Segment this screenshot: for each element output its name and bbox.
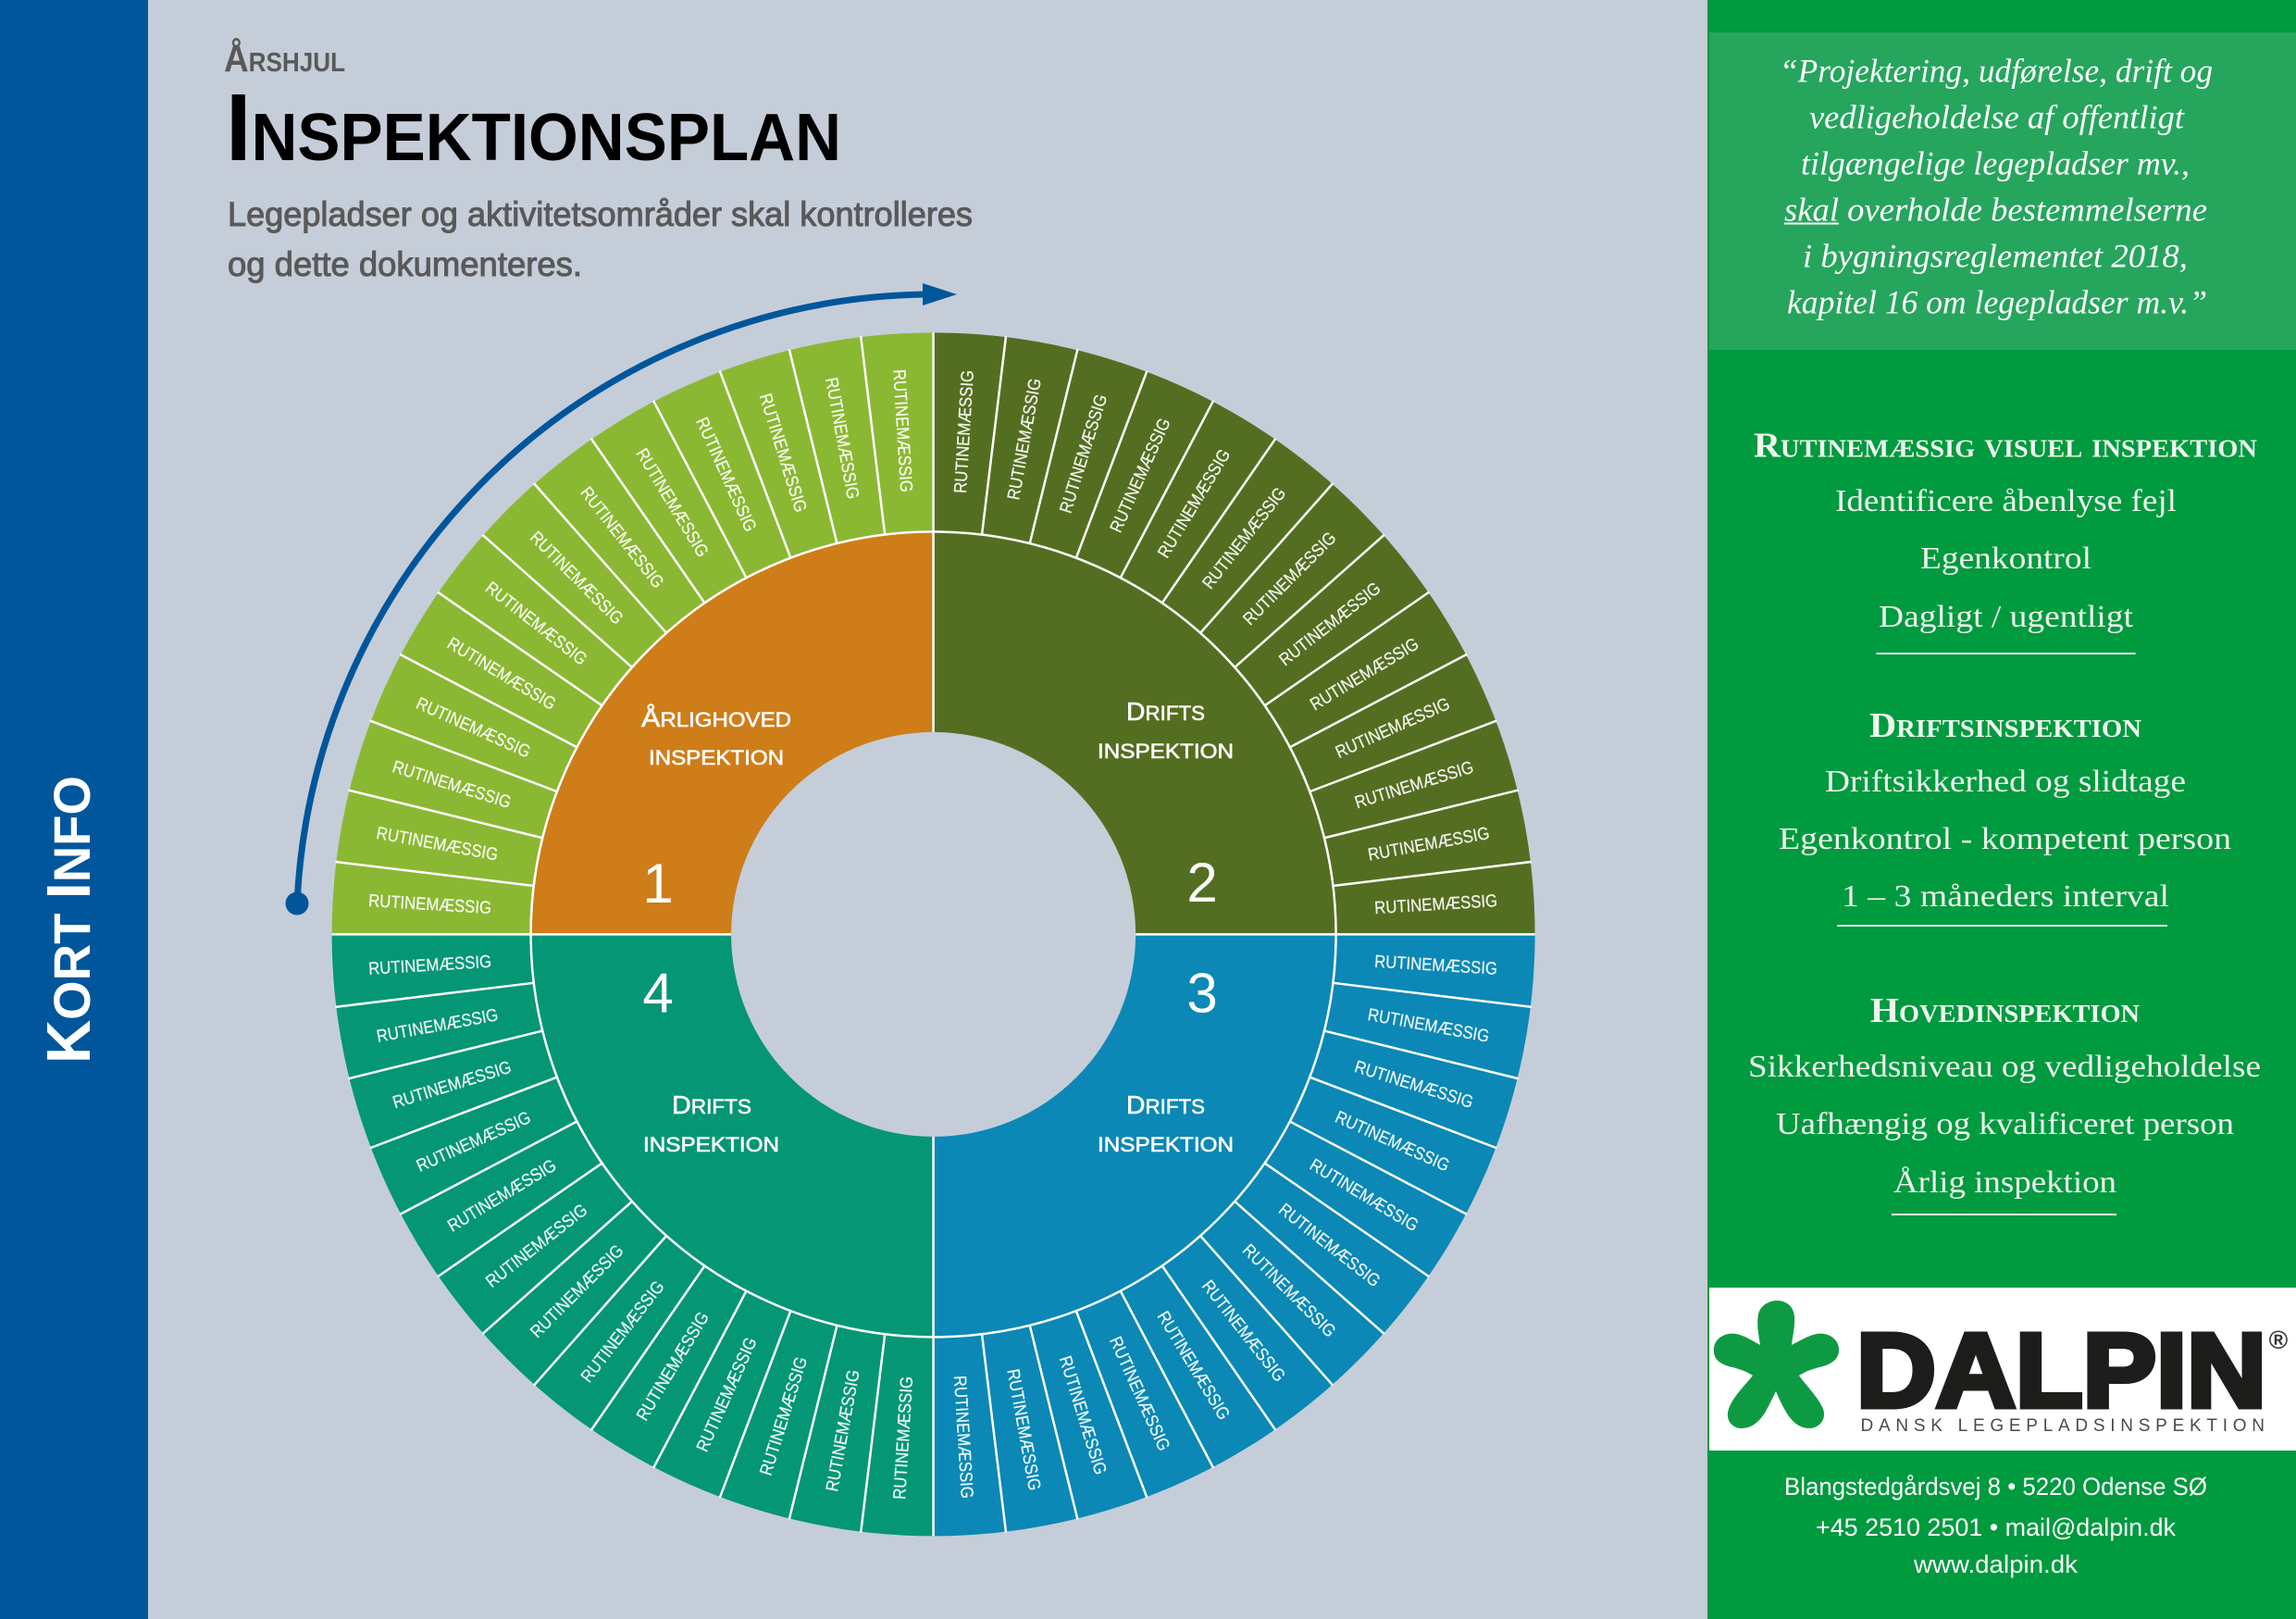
routine labels: quadrant 4: RUTINEMÆSSIG [482, 1201, 591, 1292]
routine labels: quadrant 1: RUTINEMÆSSIG [691, 415, 760, 535]
routine labels: quadrant 1: RUTINEMÆSSIG [413, 694, 533, 763]
callout: legal quote: skal overholde bestemmelserne [1784, 191, 2207, 228]
routine labels: quadrant 4: RUTINEMÆSSIG [527, 1241, 627, 1342]
arrow: year direction [285, 283, 957, 915]
caption: quadrant 1 [641, 704, 791, 769]
tagline: DANSK LEGEPLADSINSPEKTION [1860, 1416, 2265, 1436]
caption: quadrant 3 [1098, 1090, 1234, 1156]
routine labels: quadrant 4: RUTINEMÆSSIG [444, 1156, 560, 1237]
subtitle text: og dette dokumenteres. [228, 245, 582, 283]
routine labels: quadrant 4 [368, 953, 917, 1500]
routine labels: quadrant 1: RUTINEMÆSSIG [526, 528, 627, 629]
caption: quadrant 1: ÅRLIGHOVED [641, 704, 791, 732]
routine labels: quadrant 1: RUTINEMÆSSIG [576, 483, 667, 592]
contact details [1784, 1473, 2207, 1578]
inner wedge: quadrant 1 [531, 531, 934, 934]
routine labels: quadrant 2: RUTINEMÆSSIG [1353, 758, 1476, 813]
routine labels: quadrant 3: RUTINEMÆSSIG [1352, 1057, 1475, 1113]
text block: operational inspection: Egenkontrol - kompetent person [1779, 822, 2231, 856]
routine labels: quadrant 2: RUTINEMÆSSIG [1367, 824, 1491, 866]
logo: Dalpin [1709, 1288, 2296, 1451]
callout: legal quote: i bygningsreglementet 2018, [1803, 237, 2188, 274]
callout: legal quote: “Projektering, udførelse, drift og [1780, 52, 2213, 89]
routine labels: quadrant 2: RUTINEMÆSSIG [1374, 891, 1498, 918]
routine labels: quadrant 1: RUTINEMÆSSIG [631, 445, 712, 561]
routine labels: quadrant 1: RUTINEMÆSSIG [443, 634, 559, 715]
routine labels: quadrant 3: RUTINEMÆSSIG [1002, 1367, 1044, 1492]
caption: quadrant 4: INSPEKTION [643, 1133, 779, 1156]
quadrant 4: operational inspection [332, 934, 934, 1536]
panel: right info column [1707, 0, 2296, 1619]
routine labels: quadrant 3: RUTINEMÆSSIG [1105, 1334, 1173, 1454]
caption: quadrant 2 [1098, 697, 1234, 763]
routine labels: quadrant 2: RUTINEMÆSSIG [1333, 694, 1453, 763]
routine labels: quadrant 2: RUTINEMÆSSIG [1154, 446, 1235, 562]
caption: quadrant 1: INSPEKTION [649, 746, 784, 769]
number 4: 4 [642, 963, 674, 1024]
caption: quadrant 3: DRIFTS [1126, 1090, 1205, 1119]
routine labels: quadrant 4: RUTINEMÆSSIG [391, 1058, 514, 1113]
routine labels: quadrant 2 [951, 369, 1498, 918]
wedge and ring: quadrant 3 [934, 934, 1535, 1536]
routine labels: quadrant 2: RUTINEMÆSSIG [1004, 377, 1046, 502]
text block: main inspection: Sikkerhedsniveau og vedligeholdelse [1748, 1050, 2261, 1084]
subtitle text [228, 195, 973, 283]
routine labels: quadrant 3 [949, 953, 1498, 1499]
routine labels: quadrant 3: RUTINEMÆSSIG [1306, 1155, 1421, 1236]
routine labels: quadrant 3: RUTINEMÆSSIG [1366, 1005, 1491, 1047]
routine labels: quadrant 2: RUTINEMÆSSIG [1276, 579, 1384, 670]
routine labels: quadrant 2: RUTINEMÆSSIG [1240, 529, 1340, 629]
routine labels: quadrant 3: RUTINEMÆSSIG [1374, 953, 1498, 979]
header: title block [224, 37, 973, 283]
callout: legal quote: kapitel 16 om legepladser m.v.” [1787, 283, 2207, 320]
routine labels: quadrant 4: RUTINEMÆSSIG [890, 1376, 917, 1500]
text block: operational inspection [1779, 706, 2231, 927]
chart: annual wheel [332, 332, 1535, 1536]
quadrant 2: operational inspection [934, 332, 1535, 934]
routine labels: quadrant 3: RUTINEMÆSSIG [1274, 1200, 1384, 1291]
routine labels: quadrant 2: RUTINEMÆSSIG [1199, 484, 1290, 593]
routine labels: quadrant 3: RUTINEMÆSSIG [1153, 1308, 1234, 1424]
text block: routine visual inspection [1754, 426, 2258, 654]
routine labels: quadrant 3: RUTINEMÆSSIG [1238, 1240, 1339, 1341]
routine labels: quadrant 1: RUTINEMÆSSIG [755, 392, 810, 515]
text block: operational inspection: Driftsikkerhed og slidtage [1825, 765, 2186, 799]
routine labels: quadrant 1 [368, 368, 915, 918]
routine labels: quadrant 2: RUTINEMÆSSIG [1057, 392, 1111, 516]
quadrant 3: operational inspection [934, 934, 1535, 1536]
routine labels: quadrant 3: RUTINEMÆSSIG [1332, 1108, 1452, 1176]
routine labels: quadrant 4: RUTINEMÆSSIG [757, 1354, 812, 1478]
wordmark: DALPIN: DALPIN [1856, 1313, 2266, 1429]
panel: left sidebar [0, 0, 148, 1619]
routine labels: quadrant 1: RUTINEMÆSSIG [481, 579, 590, 669]
caption: quadrant 4: DRIFTS [672, 1090, 751, 1119]
sidebar heading: Kort Info: KORT INFO [34, 776, 104, 1064]
routine labels: quadrant 2: RUTINEMÆSSIG [951, 369, 978, 493]
text block: main inspection: Hovedinspektion [1870, 991, 2141, 1030]
contact details: +45 2510 2501 • mail@dalpin.dk [1816, 1513, 2176, 1541]
caption: quadrant 2: DRIFTS [1126, 697, 1205, 726]
contact details: www.dalpin.dk [1913, 1551, 2079, 1578]
text block: operational inspection: Driftsinspektion [1869, 706, 2142, 745]
text block: operational inspection: 1 – 3 måneders interval [1842, 879, 2169, 914]
routine labels: quadrant 4: RUTINEMÆSSIG [375, 1005, 500, 1047]
callout: legal quote: tilgængelige legepladser mv., [1801, 144, 2190, 181]
text block: routine visual inspection: Dagligt / ugentligt [1879, 600, 2134, 634]
subtitle text: Legepladser og aktivitetsområder skal kontrolleres [228, 195, 973, 233]
routine labels: quadrant 1: RUTINEMÆSSIG [368, 891, 492, 918]
routine labels: quadrant 1: RUTINEMÆSSIG [888, 368, 915, 492]
number 2: 2 [1186, 852, 1218, 914]
routine labels: quadrant 4: RUTINEMÆSSIG [693, 1335, 762, 1455]
routine labels: quadrant 4: RUTINEMÆSSIG [577, 1277, 669, 1387]
text block: routine visual inspection: Identificere åbenlyse fejl [1835, 484, 2177, 518]
quadrant 1: annual main inspection [332, 332, 934, 934]
text block: main inspection [1748, 991, 2261, 1215]
wedge and ring: quadrant 2 [934, 332, 1535, 934]
callout: legal quote [1709, 32, 2296, 350]
routine labels: quadrant 3: RUTINEMÆSSIG [1198, 1277, 1289, 1386]
contact details: Blangstedgårdsvej 8 • 5220 Odense SØ [1784, 1473, 2207, 1501]
wedge and ring: quadrant 4 [332, 934, 934, 1536]
routine labels: quadrant 3: RUTINEMÆSSIG [1055, 1353, 1110, 1477]
routine labels: quadrant 1: RUTINEMÆSSIG [821, 376, 863, 501]
text block: routine visual inspection: Egenkontrol [1920, 542, 2091, 576]
caption: quadrant 4 [643, 1090, 779, 1156]
caption: quadrant 3: INSPEKTION [1098, 1133, 1234, 1156]
number 3: 3 [1186, 963, 1218, 1024]
text block: routine visual inspection: Rutinemæssig visuel inspektion [1754, 426, 2258, 465]
ring segments: quadrant 1 [332, 332, 934, 934]
routine labels: quadrant 2: RUTINEMÆSSIG [1307, 634, 1422, 715]
routine labels: quadrant 2: RUTINEMÆSSIG [1107, 416, 1175, 536]
kicker: Årshjul: Årshjul [224, 37, 345, 80]
routine labels: quadrant 3: RUTINEMÆSSIG [949, 1375, 976, 1499]
routine labels: quadrant 4: RUTINEMÆSSIG [368, 953, 492, 979]
wheel labels: quadrant captions and numbers [641, 697, 1234, 1156]
callout: legal quote: vedligeholdelse af offentligt [1809, 98, 2185, 135]
routine labels: quadrant 1: RUTINEMÆSSIG [375, 824, 500, 865]
routine labels: quadrant 4: RUTINEMÆSSIG [633, 1309, 714, 1425]
title: Inspektionsplan: Inspektionsplan [226, 74, 841, 181]
caption: quadrant 2: INSPEKTION [1098, 740, 1234, 763]
icon: green flower [1714, 1301, 1839, 1428]
registered mark: ® [2269, 1326, 2289, 1354]
routine labels: quadrant 4: RUTINEMÆSSIG [823, 1368, 864, 1493]
number 1: 1 [642, 853, 674, 915]
text block: main inspection: Uafhængig og kvalificeret person [1776, 1107, 2234, 1141]
routine labels: quadrant 4: RUTINEMÆSSIG [414, 1108, 534, 1177]
text block: main inspection: Årlig inspektion [1893, 1165, 2116, 1200]
routine labels: quadrant 1: RUTINEMÆSSIG [390, 757, 514, 813]
